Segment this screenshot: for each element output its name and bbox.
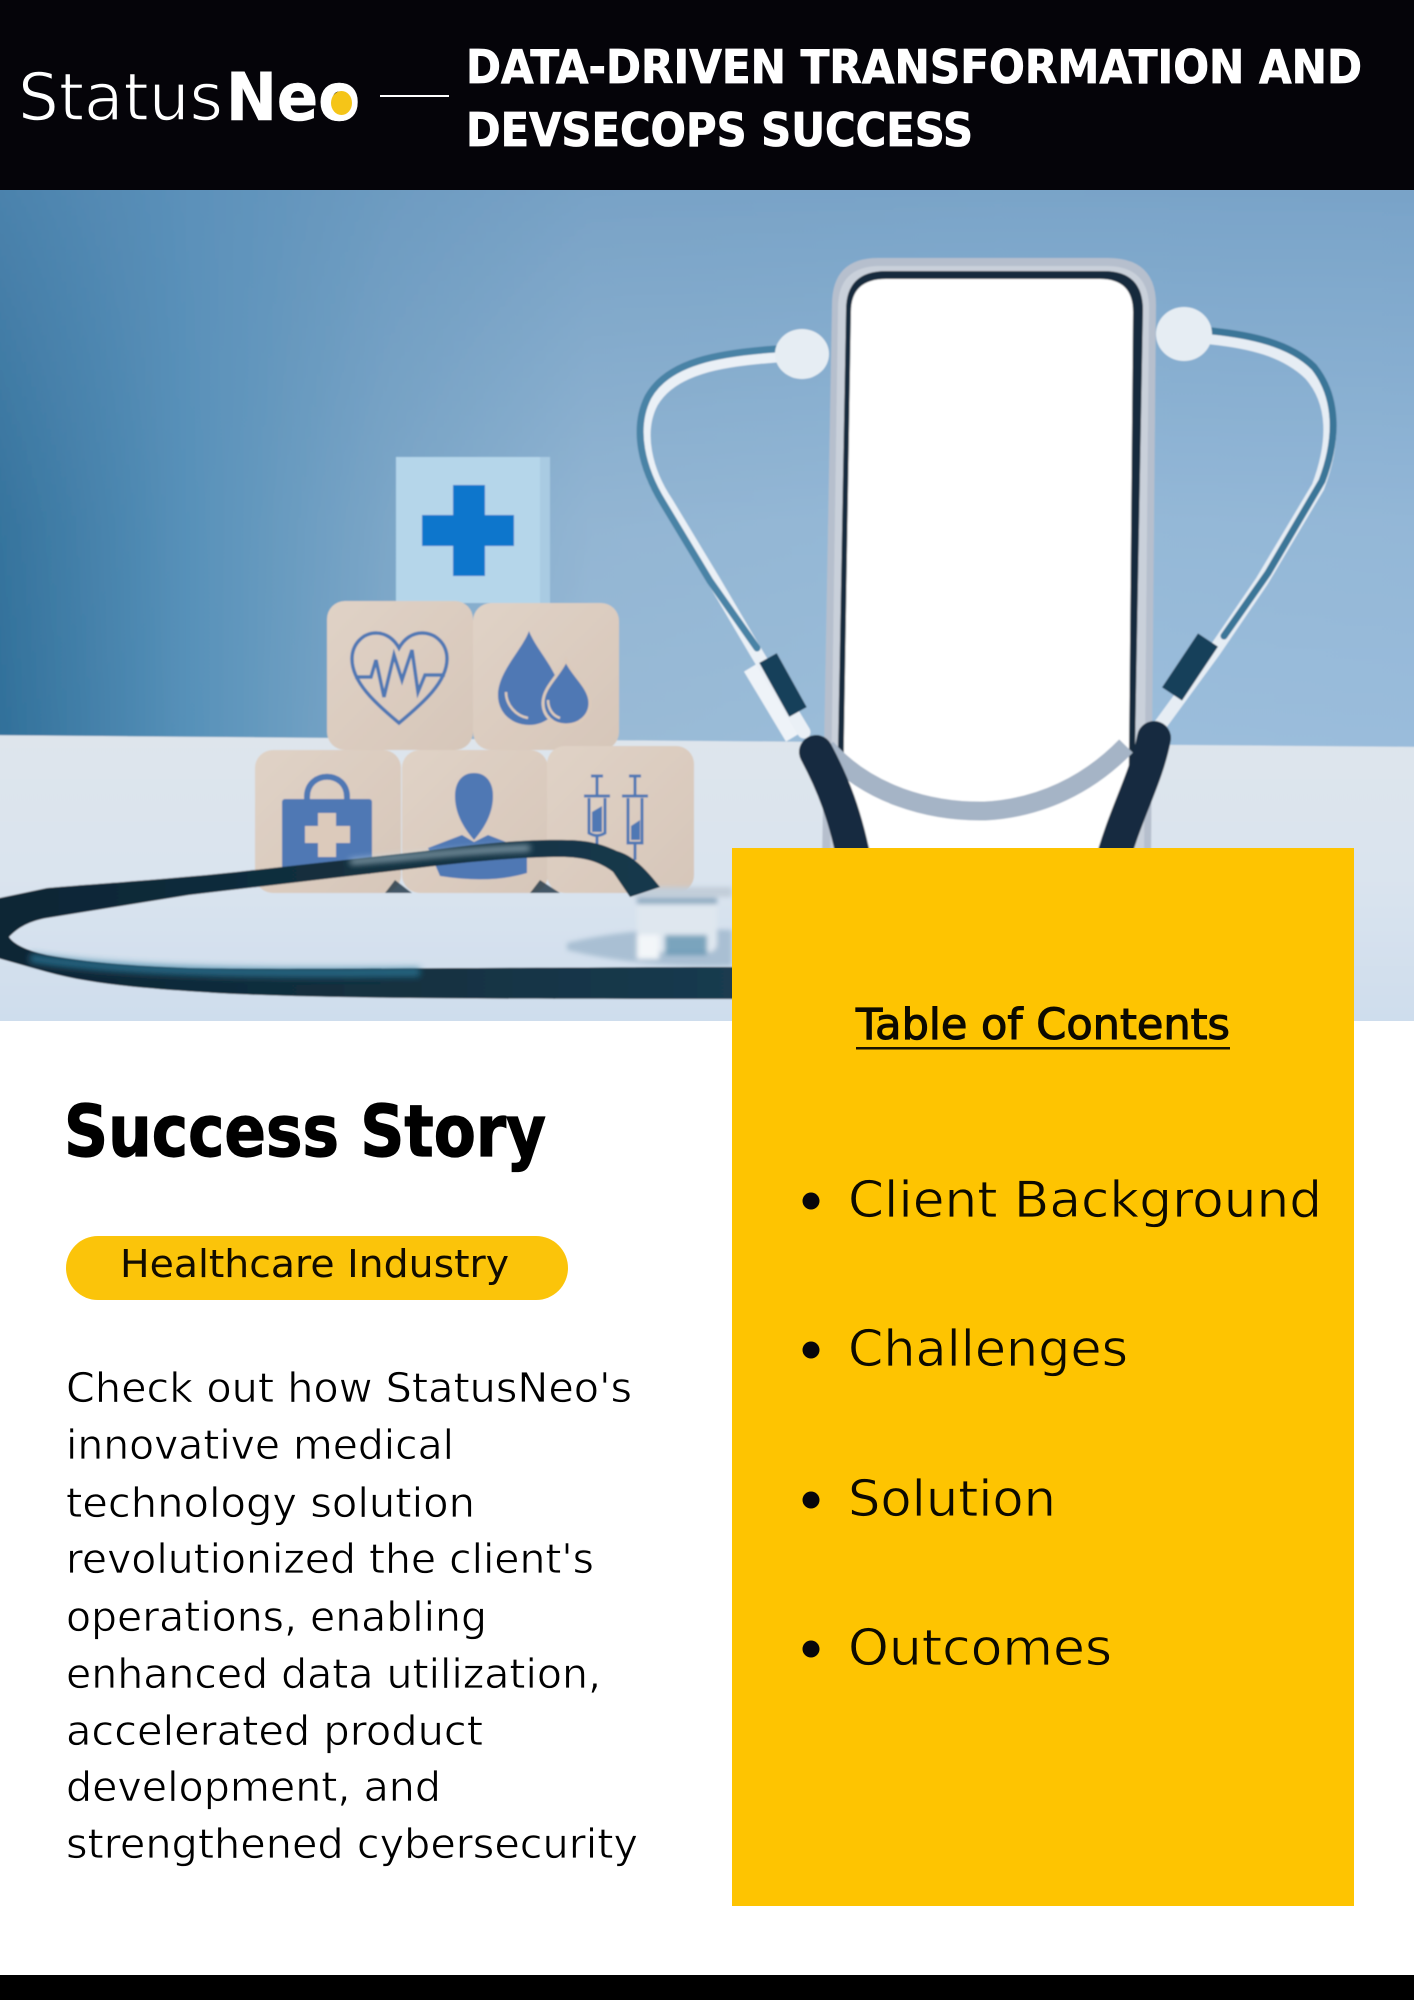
list item: Client Background: Client Background	[848, 1171, 1322, 1229]
heading: Success Story: Success Story	[64, 1090, 546, 1173]
header bar	[0, 0, 1414, 190]
list item: Outcomes: Outcomes	[848, 1619, 1112, 1677]
badge: Healthcare Industry: Healthcare Industry	[120, 1242, 509, 1286]
body text: development, and	[66, 1763, 441, 1811]
list item: Challenges: Challenges	[848, 1320, 1128, 1378]
block: heart with pulse	[327, 601, 473, 750]
phone	[822, 258, 1156, 860]
block: medical bag	[255, 750, 401, 893]
list item: Solution: Solution	[848, 1470, 1056, 1528]
body text: operations, enabling	[66, 1593, 487, 1641]
header divider line	[380, 95, 449, 97]
shadow under blocks	[385, 880, 560, 893]
footer bar	[0, 1975, 1414, 2000]
body text: revolutionized the client's	[66, 1535, 594, 1583]
title: DATA-DRIVEN TRANSFORMATION AND	[466, 40, 1362, 94]
block: water drops	[473, 603, 619, 750]
title	[466, 40, 1362, 157]
stethoscope dark tubes	[816, 738, 1154, 870]
title: DEVSECOPS SUCCESS	[466, 103, 973, 157]
logo: StatusNeo: Neo	[226, 59, 360, 136]
left ear tip	[775, 329, 829, 379]
body text: Check out how StatusNeo's	[66, 1364, 632, 1412]
block: syringes	[547, 746, 694, 893]
body text	[66, 1364, 638, 1868]
body text: accelerated product	[66, 1707, 483, 1755]
stethoscope hose	[0, 840, 760, 999]
logo: StatusNeo	[18, 59, 360, 136]
stethoscope ear tubes	[640, 331, 1333, 738]
block: blue cross	[396, 457, 550, 603]
stethoscope metal band	[826, 746, 1126, 811]
body text: strengthened cybersecurity	[66, 1820, 638, 1868]
hero photo: medical blocks and stethoscope	[0, 170, 1414, 1045]
table of contents heading: Table of Contents	[855, 1000, 1230, 1050]
panel: table of contents	[732, 848, 1354, 1906]
chest piece	[567, 887, 732, 966]
body text: enhanced data utilization,	[66, 1650, 601, 1698]
body text: innovative medical	[66, 1421, 454, 1469]
badge: Healthcare Industry	[66, 1236, 568, 1300]
block: person	[402, 750, 548, 893]
body text: technology solution	[66, 1479, 475, 1527]
right ear tip	[1156, 307, 1212, 361]
logo: StatusNeo: Status	[18, 59, 223, 136]
